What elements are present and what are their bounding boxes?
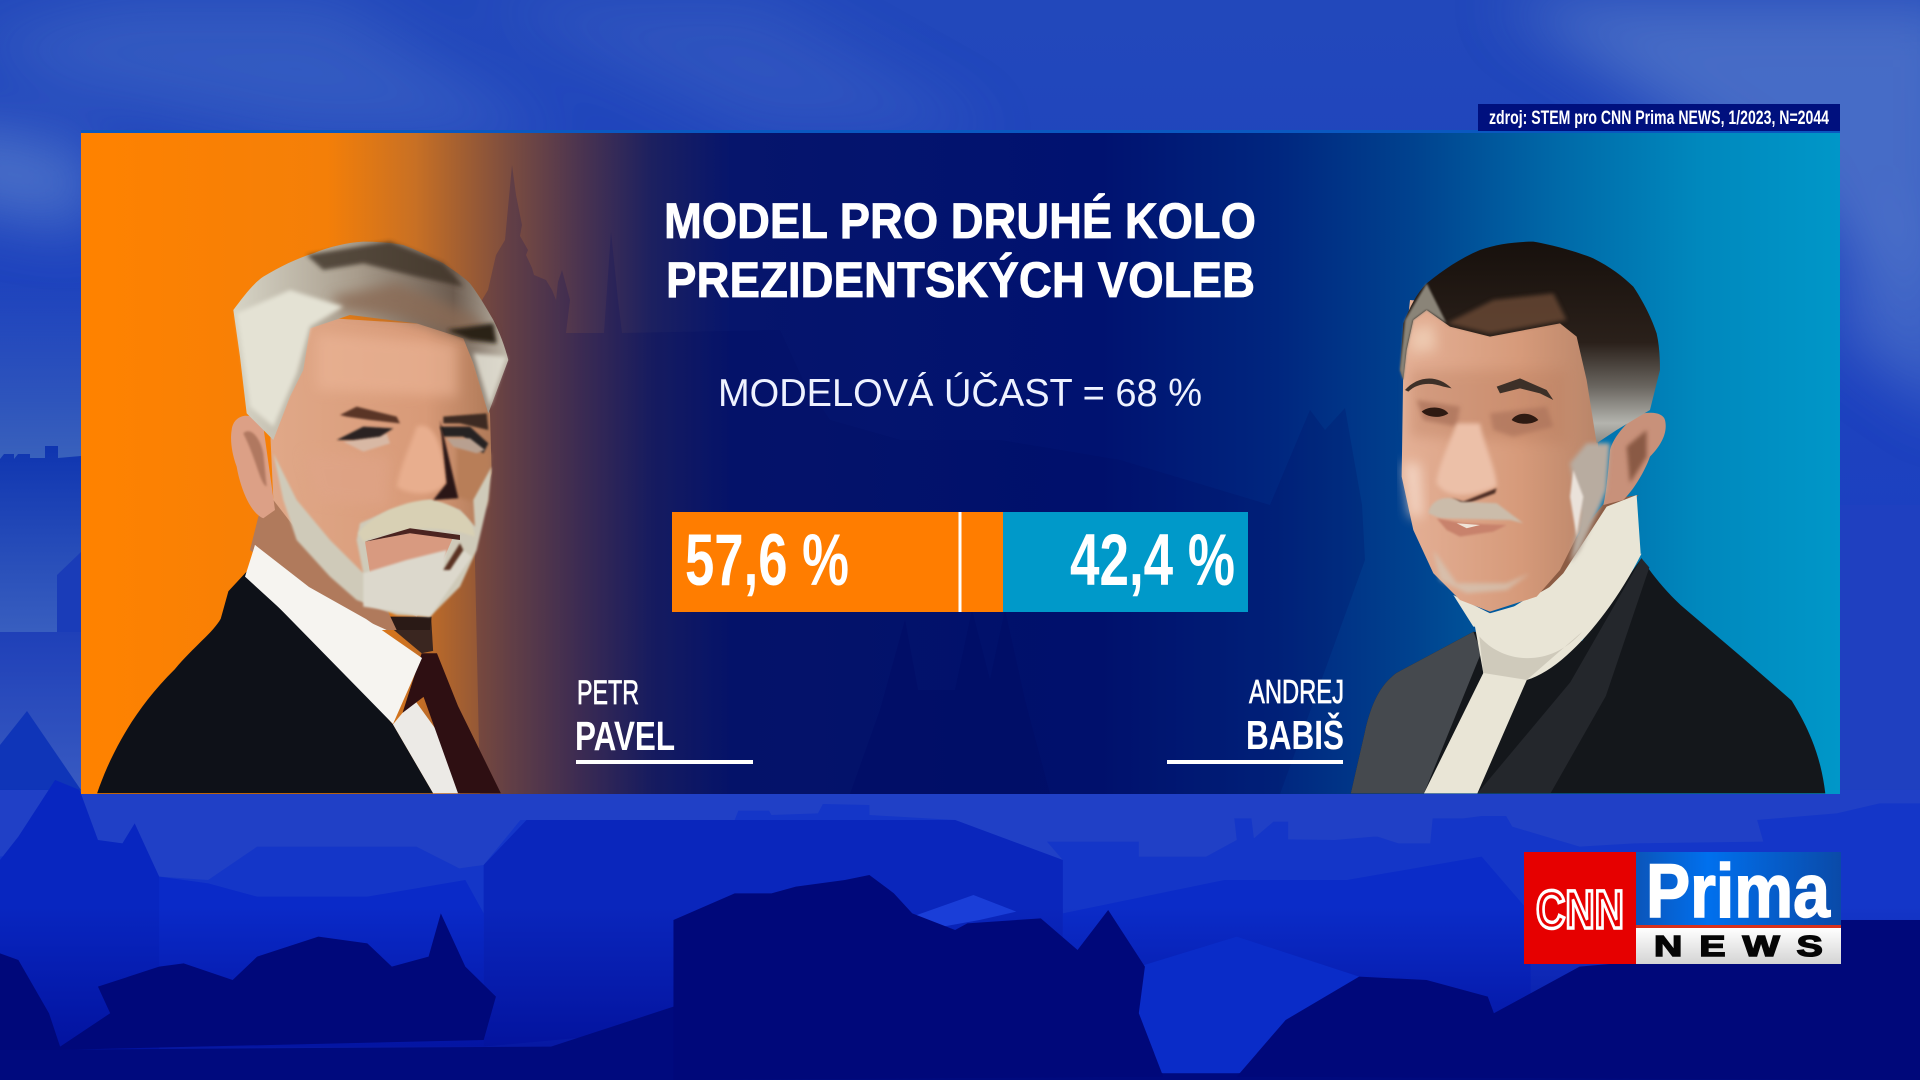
title: PREZIDENTSKÝCH VOLEB [666,252,1255,308]
portrait: Petr Pavel [97,242,508,793]
logo: CNN Prima News [1524,849,1841,964]
source tag [1478,104,1840,131]
title: MODEL PRO DRUHÉ KOLO [664,193,1256,249]
body and suit [97,571,501,793]
name label: Andrej Babiš: ANDREJ [1249,673,1344,710]
panel: main gradient card [81,130,1840,794]
nose [397,426,447,493]
panel castle silhouette [470,165,1365,794]
lower collar [247,545,422,724]
moustache [1428,498,1523,523]
logo: CNN Prima News: Prima [1646,849,1831,934]
hair [1400,242,1660,443]
eyebrows [1405,378,1452,392]
nose [1437,423,1497,495]
subtitle: model turnout: MODELOVÁ ÚČAST = 68 % [718,371,1202,415]
head [1400,242,1666,630]
portrait: Andrej Babiš [1351,242,1825,793]
name label: Andrej Babiš [1167,673,1344,764]
name label: Petr Pavel: PETR [577,674,639,712]
chin stubble [1433,550,1530,593]
value: Babiš: 42,4 % [1070,520,1235,601]
logo: CNN Prima News: NEWS [1654,931,1823,963]
head [231,242,508,630]
eyes [1422,407,1448,417]
background: layered castle skyline [0,780,1920,1080]
eyebrows [340,407,400,423]
majority marker [958,512,962,612]
shirt collar [245,545,387,630]
logo: CNN Prima News: CNN [1536,880,1624,940]
value: Pavel: 57,6 % [685,520,849,601]
name label: Petr Pavel [575,674,753,764]
hair [233,242,508,440]
name label: Petr Pavel: PAVEL [575,713,675,759]
beard [273,453,492,617]
name label: Andrej Babiš: BABIŠ [1246,712,1344,758]
title [664,193,1256,308]
sideburn [1570,443,1610,563]
bar: Babiš [1003,512,1248,612]
mouth [1437,518,1507,537]
bar: Pavel [672,512,1003,612]
bar chart: result split [672,512,1248,612]
eyes [343,433,390,452]
jacket and body [1351,549,1825,793]
eye sockets [1417,400,1460,427]
